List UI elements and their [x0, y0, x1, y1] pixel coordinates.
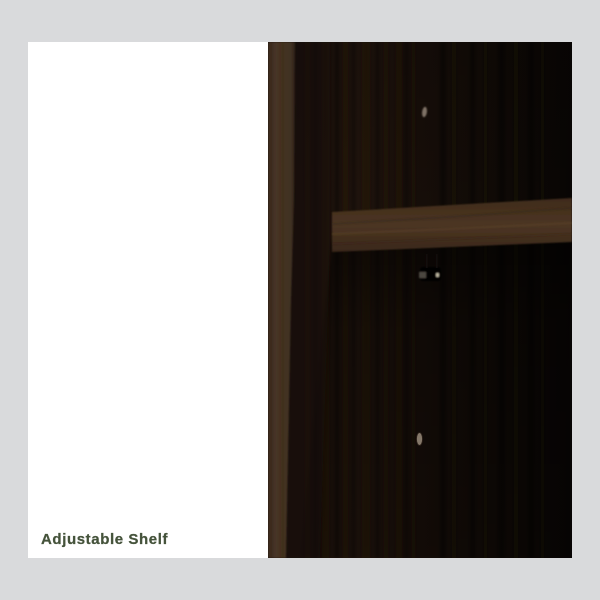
lower shelf peg hole — [416, 433, 422, 445]
shelf support pin — [419, 254, 441, 281]
photo: shelf interior — [268, 42, 572, 558]
left side panel — [268, 42, 296, 558]
back wood panel — [268, 42, 572, 558]
adjustable shelf board — [332, 198, 572, 252]
caption: Adjustable Shelf — [41, 531, 168, 548]
white text panel — [28, 42, 268, 558]
infographic canvas — [28, 42, 572, 558]
upper shelf peg hole — [421, 107, 428, 117]
